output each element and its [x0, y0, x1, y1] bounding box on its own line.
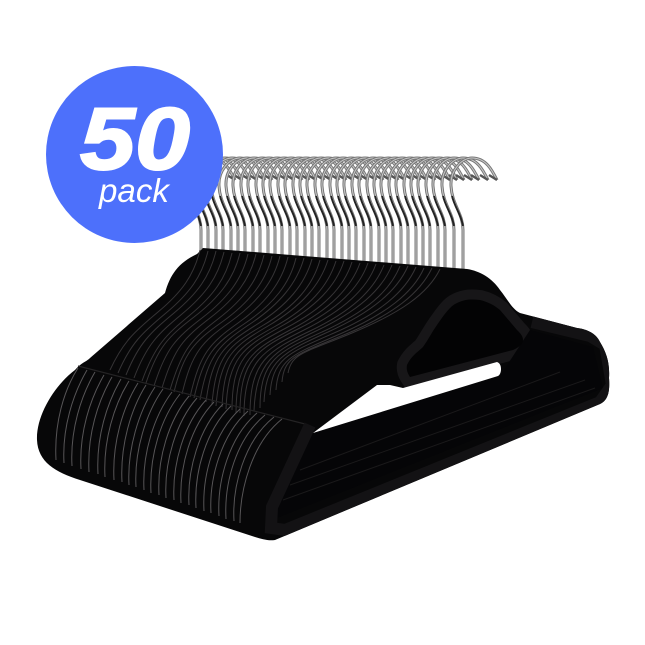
rod lines [283, 372, 595, 500]
badge number: 50 [80, 89, 190, 188]
upper hanger band [407, 299, 523, 377]
badge: 50 pack [46, 66, 223, 243]
upper hanger opening [407, 299, 523, 377]
upper rib lines [110, 250, 440, 416]
lower hanger band [271, 322, 612, 530]
ridge between upper and lower stack [78, 366, 305, 424]
lower rib lines [56, 368, 282, 523]
front hanger face [271, 299, 612, 530]
metal hooks [189, 158, 497, 278]
badge circle [46, 66, 223, 243]
stack silhouette [37, 248, 609, 540]
hanger stack [37, 248, 612, 540]
lower hanger rod [510, 330, 533, 361]
white gap through hangers [313, 362, 501, 433]
badge label: pack [98, 172, 170, 209]
